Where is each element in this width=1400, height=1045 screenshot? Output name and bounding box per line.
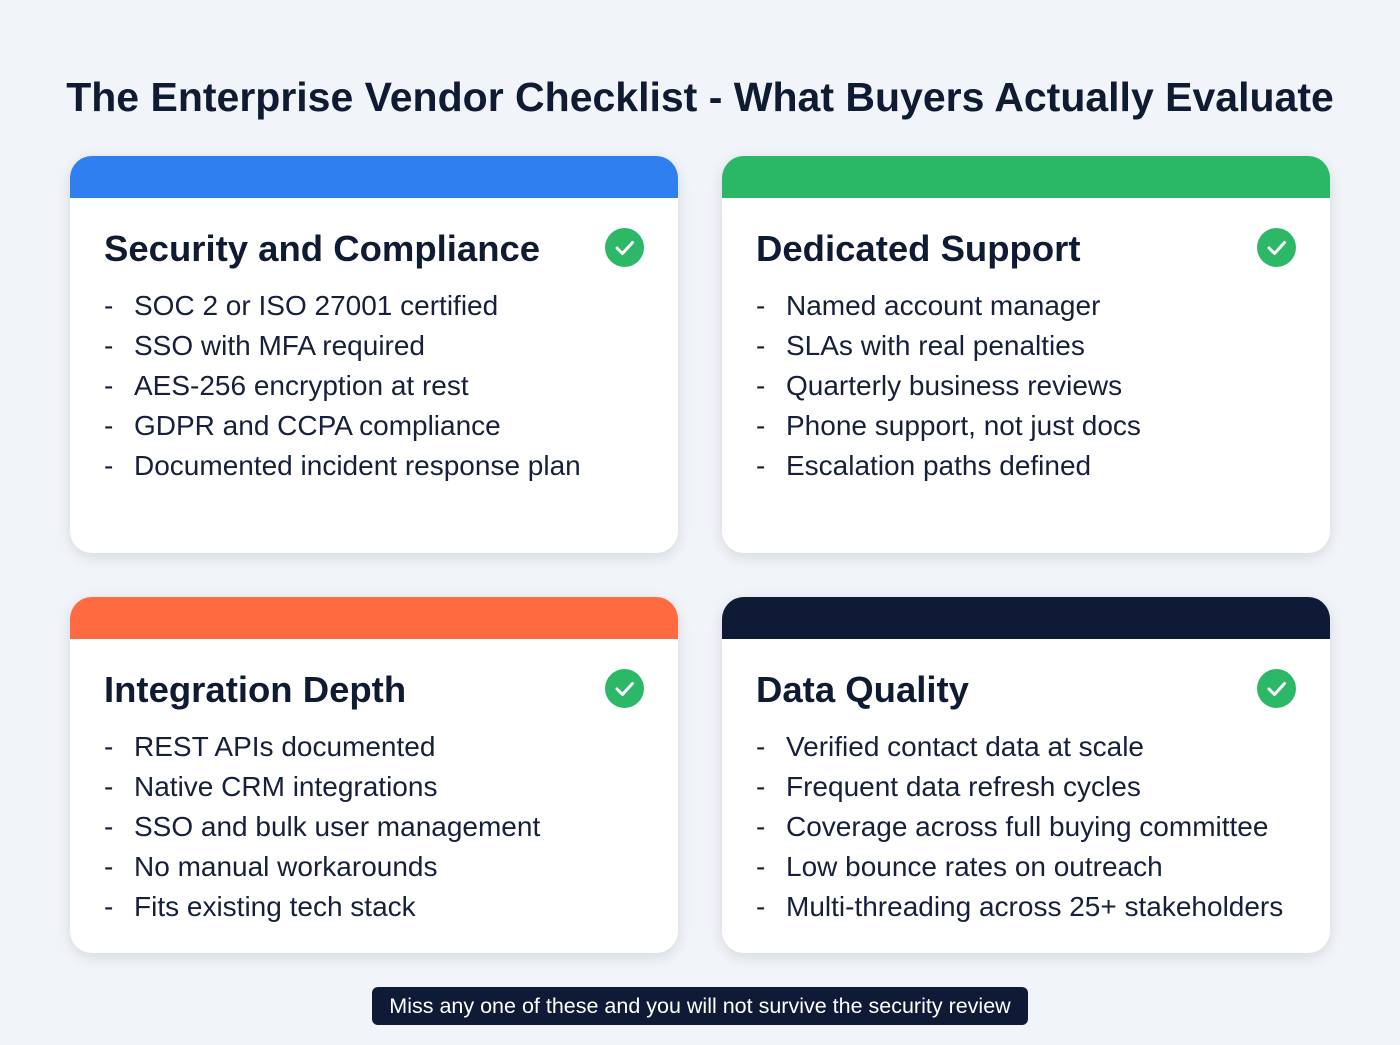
list: support items: Phone support, not just docs [786, 410, 1141, 441]
list: integration items: SSO and bulk user management [134, 811, 540, 842]
list: integration items: Fits existing tech stack [134, 891, 416, 922]
panel: data quality [722, 597, 1330, 953]
title: The Enterprise Vendor Checklist - What Buyers Actually Evaluate [66, 74, 1334, 120]
list: support items: SLAs with real penalties [786, 330, 1085, 361]
list: security items: SSO with MFA required [134, 330, 425, 361]
list: support items: - [756, 450, 765, 481]
icon: check [1257, 669, 1296, 708]
panel: dedicated support [722, 156, 1330, 553]
list: integration items: - [104, 891, 113, 922]
list: security items: - [104, 290, 113, 321]
list: security items: Documented incident response plan [134, 450, 581, 481]
list: security items: GDPR and CCPA compliance [134, 410, 501, 441]
list: integration items: REST APIs documented [134, 731, 435, 762]
list: support items: Quarterly business reviews [786, 370, 1122, 401]
list: integration items: No manual workarounds [134, 851, 438, 882]
list: data items: Verified contact data at scale [786, 731, 1144, 762]
list: security items: - [104, 370, 113, 401]
list: data items: - [756, 811, 765, 842]
list: data items: - [756, 771, 765, 802]
list: security items: - [104, 410, 113, 441]
icon: check [605, 228, 644, 267]
list: data items [756, 731, 1283, 922]
panel: integration depth [70, 597, 678, 953]
list: support items: Named account manager [786, 290, 1100, 321]
heading: security: Security and Compliance [104, 228, 540, 269]
list: data items: Coverage across full buying committee [786, 811, 1268, 842]
icon: check [605, 669, 644, 708]
heading: data quality: Data Quality [756, 669, 969, 710]
heading: support: Dedicated Support [756, 228, 1080, 269]
list: data items: - [756, 851, 765, 882]
icon: check [1257, 228, 1296, 267]
list: data items: Multi-threading across 25+ stakeholders [786, 891, 1283, 922]
list: support items: - [756, 410, 765, 441]
list: support items: Escalation paths defined [786, 450, 1091, 481]
footer callout: Miss any one of these and you will not survive the security review [389, 994, 1011, 1018]
list: security items: AES-256 encryption at rest [134, 370, 469, 401]
list: data items: - [756, 731, 765, 762]
list: support items [756, 290, 1141, 481]
list: support items: - [756, 370, 765, 401]
list: integration items: - [104, 771, 113, 802]
footer callout [372, 987, 1028, 1025]
panel: security and compliance [70, 156, 678, 553]
list: integration items [104, 731, 540, 922]
list: security items: - [104, 330, 113, 361]
list: integration items: - [104, 851, 113, 882]
list: support items: - [756, 330, 765, 361]
list: integration items: - [104, 811, 113, 842]
list: integration items: - [104, 731, 113, 762]
list: data items: Low bounce rates on outreach [786, 851, 1163, 882]
list: security items [104, 290, 581, 481]
list: security items: SOC 2 or ISO 27001 certified [134, 290, 498, 321]
list: integration items: Native CRM integrations [134, 771, 437, 802]
list: support items: - [756, 290, 765, 321]
heading: integration: Integration Depth [104, 669, 406, 710]
list: data items: Frequent data refresh cycles [786, 771, 1141, 802]
list: security items: - [104, 450, 113, 481]
list: data items: - [756, 891, 765, 922]
